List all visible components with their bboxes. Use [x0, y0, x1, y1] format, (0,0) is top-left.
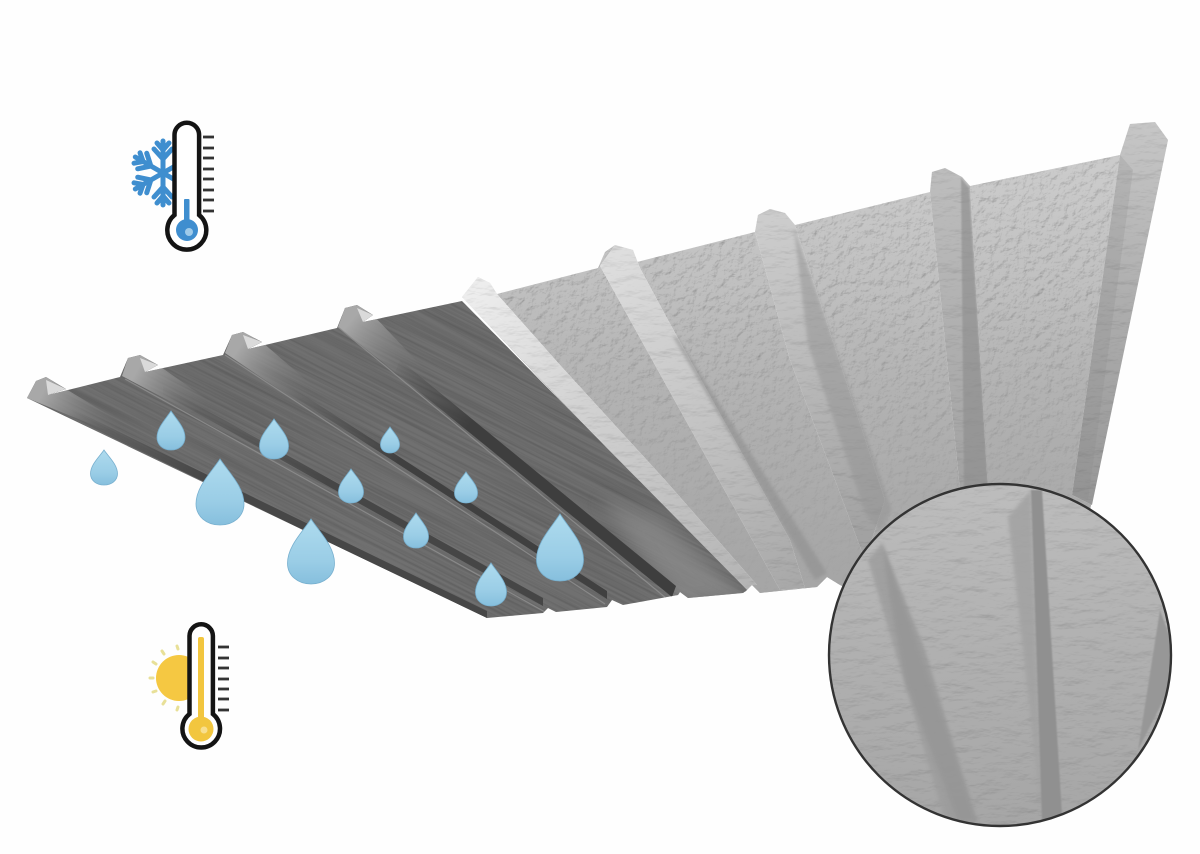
callout: magnified foam detail circle	[829, 484, 1172, 826]
foam smoothing toward the lower edge	[462, 140, 1168, 660]
metal base surface	[20, 295, 760, 625]
thermometer blue mercury	[176, 199, 198, 241]
magnified surface and ribs	[829, 484, 1172, 826]
thermometer outline	[167, 123, 206, 250]
icon: snowflake	[131, 141, 195, 205]
thermometer outline	[182, 624, 220, 748]
groove B	[306, 399, 607, 599]
panel: dark coated metal section	[27, 301, 747, 618]
panel: light insulated foam section	[462, 122, 1168, 660]
foam rib 2	[600, 245, 827, 590]
foam surface	[462, 122, 1168, 660]
foam rib 3	[755, 209, 892, 560]
groove C	[395, 360, 676, 597]
foam rib 5	[1072, 122, 1168, 505]
outer edge strip	[94, 421, 487, 618]
water droplets	[90, 411, 584, 606]
droplet 10	[476, 563, 506, 606]
icon: sun	[150, 646, 202, 710]
droplet 1	[90, 450, 118, 485]
droplet 4	[380, 427, 400, 453]
thermometer yellow mercury	[188, 637, 214, 742]
foam rib 4	[930, 168, 988, 490]
foam rib 1	[462, 277, 757, 592]
groove A	[191, 406, 543, 606]
icon: hot thermometer with sun	[150, 624, 229, 748]
droplet 9	[404, 513, 428, 548]
rib end caps	[46, 308, 373, 395]
brushed grain texture	[29, 303, 744, 618]
rib highlight lines	[125, 327, 672, 612]
droplet 8	[288, 519, 334, 584]
droplet 5	[196, 459, 244, 525]
icon: cold thermometer with snowflake	[131, 123, 214, 250]
magnifier outline	[829, 484, 1171, 826]
rib faces	[27, 305, 408, 424]
thermometer scale ticks	[218, 647, 229, 710]
droplet 2	[157, 411, 185, 450]
droplet 7	[454, 472, 478, 503]
last panel lightening	[607, 504, 742, 598]
thermometer scale ticks	[203, 137, 214, 211]
infographic canvas	[27, 120, 1172, 828]
droplet 11	[536, 514, 584, 581]
droplet 3	[260, 419, 288, 459]
droplet 6	[338, 469, 364, 503]
